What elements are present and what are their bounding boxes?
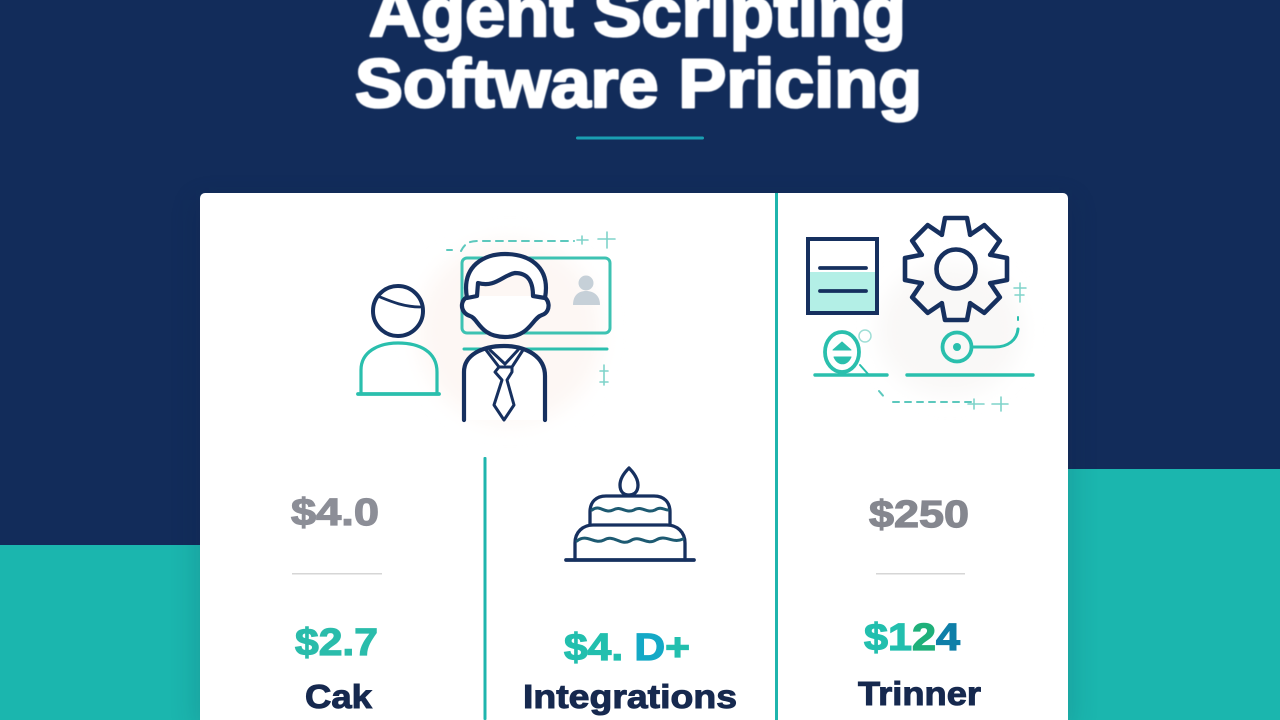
illustration: document and gear xyxy=(807,218,1033,411)
price: discounted: $4. D+ xyxy=(564,627,690,669)
smiley gear xyxy=(815,330,887,375)
screen avatar xyxy=(573,276,600,305)
title xyxy=(355,0,922,122)
title: Software Pricing xyxy=(355,45,922,122)
label: Trinner xyxy=(858,675,981,712)
plus marks xyxy=(577,232,615,248)
column: Cak xyxy=(291,492,382,715)
dashed connector: lower xyxy=(879,391,971,402)
label: Cak xyxy=(305,678,373,715)
screen panel xyxy=(462,258,610,333)
separator xyxy=(876,573,965,574)
pricing card xyxy=(200,193,1068,720)
wheel and connector xyxy=(907,317,1033,375)
icon: cake xyxy=(566,468,694,560)
separator xyxy=(292,573,382,574)
background block: right teal xyxy=(1068,469,1280,720)
price: discounted: $124 xyxy=(864,617,960,659)
dashed connector xyxy=(447,241,574,251)
small plus marks xyxy=(600,365,608,385)
right person xyxy=(462,254,549,420)
vertical divider: right column xyxy=(775,193,778,720)
column: Integrations xyxy=(523,627,737,715)
plus mark: gear side xyxy=(1014,283,1026,302)
background block: left teal xyxy=(0,545,200,720)
illustration: agents and screen xyxy=(358,232,615,424)
document icon xyxy=(807,239,877,313)
price: discounted: $2.7 xyxy=(295,622,378,664)
vertical divider: lower middle xyxy=(484,457,486,720)
plus marks: lower xyxy=(968,397,1008,411)
screen underline xyxy=(464,348,607,350)
price: list: $250 xyxy=(869,494,969,536)
title underline xyxy=(576,136,704,140)
card shadow xyxy=(196,200,1072,720)
price: list: $4.0 xyxy=(291,492,379,534)
left person xyxy=(358,286,439,394)
label: Integrations xyxy=(523,678,737,715)
column: Trinner xyxy=(858,494,981,712)
gear icon xyxy=(905,218,1007,320)
